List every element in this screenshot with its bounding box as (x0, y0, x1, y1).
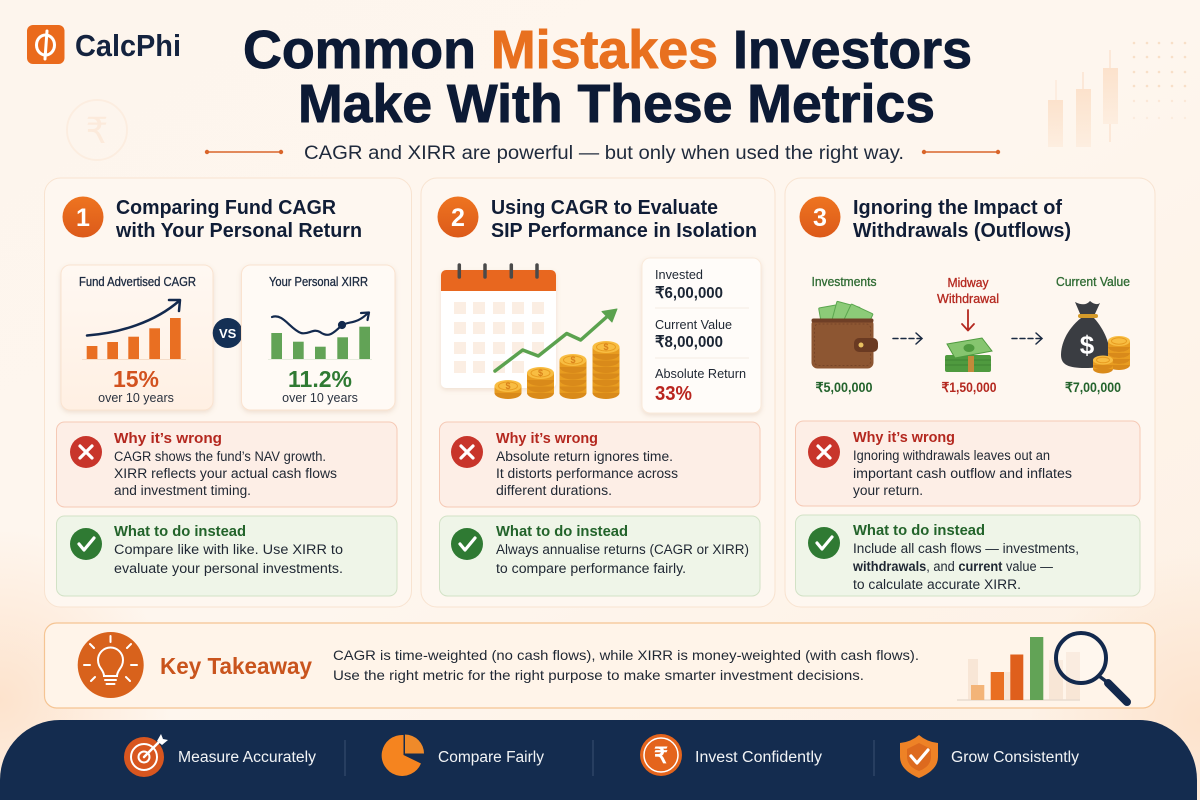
callout: why it's wrong: Why it’s wrong (853, 430, 955, 446)
card: return stats: ₹6,00,000 (655, 285, 723, 302)
icon: coin stacks: $ (505, 381, 511, 391)
card: return stats: Current Value (655, 318, 732, 332)
card: return stats: Absolute Return (655, 367, 746, 381)
vs badge: VS (219, 326, 237, 341)
takeaway text (333, 647, 919, 683)
icon: cash stack (945, 338, 992, 372)
label: investments: Investments (812, 275, 876, 289)
callout: what to do instead (440, 516, 760, 596)
callout: what to do instead: evaluate your personal investments. (114, 561, 343, 576)
icon: coin stacks (494, 341, 620, 399)
icon: rupee coin (640, 734, 682, 776)
card: return stats: ₹8,00,000 (655, 334, 723, 351)
value 15%: 15% (113, 366, 159, 392)
watermark: rupee coin (67, 100, 127, 160)
callout: why it's wrong (796, 421, 1140, 506)
bar chart: personal returns (271, 327, 370, 359)
callout: why it's wrong: XIRR reflects your actual cash flows (114, 466, 337, 481)
callout: why it's wrong: Absolute return ignores time. (496, 449, 673, 464)
bar chart: fund growth (87, 318, 181, 359)
icon: money bag and coins (1061, 301, 1130, 374)
callout: why it's wrong: your return. (853, 483, 923, 498)
logo (27, 25, 181, 64)
footer label 4: Grow Consistently (951, 749, 1079, 766)
icon: calendar (441, 265, 556, 388)
footer band (0, 720, 1197, 800)
callout: what to do instead: to calculate accurate XIRR. (853, 577, 1021, 592)
icon: rupee coin: ₹ (654, 743, 668, 768)
callout: why it's wrong: Ignoring withdrawals leaves out an (853, 448, 1050, 463)
panel: mistake 2 (421, 178, 775, 607)
chart: bars with magnifier (957, 633, 1127, 702)
takeaway text: Use the right metric for the right purpose to make smarter investment decisions. (333, 667, 864, 683)
amounts: ₹5,00,000 (816, 380, 872, 395)
card: return stats (642, 258, 761, 413)
title (243, 20, 972, 134)
icon: pie chart (382, 734, 424, 776)
amounts: ₹7,00,000 (1065, 380, 1121, 395)
watermark: dot grid (1133, 42, 1186, 119)
arrow: rising green trend (495, 309, 617, 371)
callout: what to do instead (56, 516, 397, 596)
callout: what to do instead: Compare like with like. Use XIRR to (114, 542, 343, 557)
callout: why it's wrong: different durations. (496, 483, 612, 498)
heading 2: Using CAGR to Evaluate (491, 197, 718, 219)
takeaway text: CAGR is time-weighted (no cash flows), while XIRR is money-weighted (with cash flows). (333, 647, 919, 663)
arrow: fund growth curve (87, 300, 180, 336)
footer label 3: Invest Confidently (695, 749, 822, 766)
card: return stats: Invested (655, 268, 703, 282)
number badge 3 (800, 196, 840, 238)
arrow: dashed 2 (1012, 333, 1042, 344)
callout: what to do instead: What to do instead (496, 524, 628, 540)
arrow: down red (962, 310, 974, 330)
caption: over 10 years (282, 391, 358, 405)
number badge 2: 2 (451, 204, 465, 232)
card: fund advertised CAGR (61, 265, 213, 410)
footer label 2: Compare Fairly (438, 749, 544, 766)
label: current value: Current Value (1056, 275, 1130, 289)
card: personal XIRR: Your Personal XIRR (269, 275, 368, 289)
callout: why it's wrong: important cash outflow and inflates (853, 466, 1072, 481)
callout: what to do instead: Always annualise returns (CAGR or XIRR) (496, 542, 749, 557)
panel: key takeaway (44, 623, 1155, 708)
callout: what to do instead (796, 515, 1140, 596)
amounts (816, 380, 1121, 395)
callout: why it's wrong: Why it’s wrong (496, 431, 598, 447)
label: midway withdrawal: Midway (948, 276, 989, 290)
callout: what to do instead: to compare performance fairly. (496, 561, 686, 576)
heading 2: SIP Performance in Isolation (491, 220, 757, 242)
callout: why it's wrong (440, 422, 760, 507)
heading: key takeaway: Key Takeaway (160, 653, 312, 679)
callout: why it's wrong: CAGR shows the fund’s NAV growth. (114, 449, 326, 464)
number badge 2 (438, 196, 478, 238)
watermark: candlesticks (1048, 50, 1118, 147)
icon: wallet with cash (812, 301, 878, 368)
callout: why it's wrong: It distorts performance across (496, 466, 678, 481)
label: midway withdrawal: Withdrawal (937, 292, 999, 306)
heading 3 (853, 197, 1071, 242)
panel: mistake 1 (44, 178, 412, 607)
card: fund advertised CAGR: Fund Advertised CAGR (79, 275, 196, 289)
arrow: dashed 1 (893, 333, 922, 344)
number badge 1 (62, 196, 104, 238)
number badge 1: 1 (76, 204, 90, 232)
card: return stats: 33% (655, 383, 692, 405)
logo: CalcPhi (75, 28, 181, 63)
heading 1 (115, 197, 362, 242)
watermark: rupee coin: ₹ (86, 110, 108, 151)
title: Make With These Metrics (298, 74, 935, 134)
number badge 3: 3 (813, 204, 827, 232)
callout: why it's wrong (56, 422, 397, 507)
amounts: ₹1,50,000 (942, 380, 996, 395)
title: Common Mistakes Investors (243, 20, 972, 80)
callout: why it's wrong: Why it’s wrong (114, 431, 222, 447)
callout: what to do instead: Include all cash flows — investments, (853, 541, 1079, 556)
caption: over 10 years (98, 391, 174, 405)
icon: light bulb (78, 632, 144, 698)
callout: what to do instead: withdrawals, and current value — (852, 559, 1053, 574)
icon: money bag and coins: $ (1080, 330, 1095, 360)
panel: mistake 3 (785, 178, 1155, 607)
heading 2 (491, 197, 757, 242)
arrow: wavy returns line (272, 312, 369, 335)
icon: target (124, 734, 168, 777)
footer label 1: Measure Accurately (178, 749, 316, 766)
value 11.2%: 11.2% (288, 366, 352, 392)
callout: what to do instead: What to do instead (114, 524, 246, 540)
label: midway withdrawal (937, 276, 999, 306)
heading 3: Ignoring the Impact of (853, 197, 1062, 219)
heading 1: Comparing Fund CAGR (116, 197, 337, 219)
icon: coin stacks: $ (603, 342, 609, 352)
callout: what to do instead: What to do instead (853, 523, 985, 539)
heading 3: Withdrawals (Outflows) (853, 220, 1071, 242)
icon: coin stacks: $ (570, 355, 576, 365)
subtitle: CAGR and XIRR are powerful — but only when used the right way. (304, 143, 904, 164)
icon: coin stacks: $ (538, 368, 543, 378)
card: personal XIRR (242, 265, 395, 410)
vs badge (213, 318, 243, 348)
icon: shield check (900, 735, 938, 778)
callout: why it's wrong: and investment timing. (114, 483, 251, 498)
heading 1: with Your Personal Return (115, 220, 362, 242)
